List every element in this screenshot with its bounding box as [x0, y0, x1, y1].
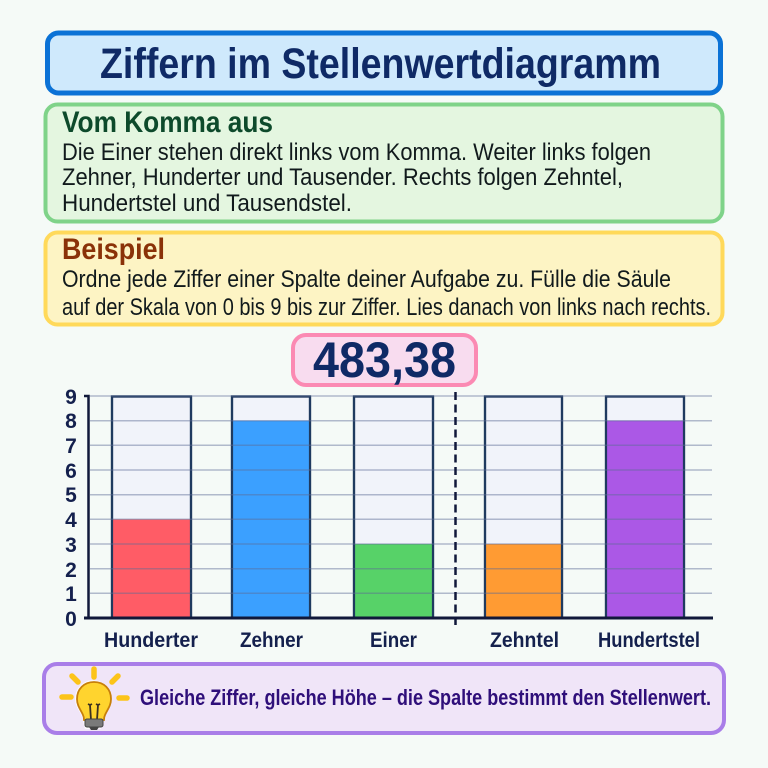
- bar: Einer 3: [354, 396, 433, 618]
- column labels: Einer: [370, 629, 417, 652]
- column labels: Hunderter: [104, 629, 198, 652]
- bar: Zehntel 3: [485, 396, 562, 618]
- y axis labels: [65, 386, 77, 631]
- y axis labels: 5: [65, 484, 77, 507]
- text block: Vom Komma aus: Hundertstel und Tausendstel.: [62, 190, 352, 217]
- column labels: [104, 629, 700, 652]
- panel: Beispiel: [46, 232, 722, 324]
- y axis labels: 7: [65, 435, 77, 458]
- y axis labels: 6: [65, 460, 77, 483]
- bar: Hundertstel 8: [606, 396, 684, 618]
- text block: Vom Komma aus: Die Einer stehen direkt links vom Komma. Weiter links folgen: [62, 139, 651, 166]
- text block: Vom Komma aus: Zehner, Hunderter und Tausender. Rechts folgen Zehntel,: [62, 164, 623, 191]
- y axis labels: 0: [65, 608, 77, 631]
- text block: Beispiel: [62, 266, 711, 321]
- number callout: 483,38: 483,38: [313, 332, 456, 388]
- heading: Vom Komma aus: Vom Komma aus: [62, 106, 273, 139]
- heading: Beispiel: Beispiel: [62, 233, 165, 266]
- column labels: Zehntel: [490, 629, 559, 652]
- axes: [84, 396, 713, 618]
- y axis labels: 9: [65, 386, 77, 409]
- panel: tip: [44, 664, 724, 733]
- bar: Hunderter 4: [112, 396, 191, 618]
- panel: Vom Komma aus: [46, 104, 722, 222]
- y axis labels: 2: [65, 559, 77, 582]
- y axis labels: 1: [65, 583, 77, 606]
- y axis labels: 4: [65, 509, 77, 532]
- bar: Zehner 8: [232, 396, 310, 618]
- text block: Beispiel: Ordne jede Ziffer einer Spalte deiner Aufgabe zu. Fülle die Säule: [62, 266, 671, 293]
- title: Ziffern im Stellenwertdiagramm: [100, 40, 661, 88]
- y axis labels: 3: [65, 534, 77, 557]
- grid lines: [90, 396, 712, 593]
- column labels: Hundertstel: [598, 629, 700, 652]
- bar chart: [65, 386, 713, 652]
- icon: light bulb: [62, 669, 127, 730]
- column labels: Zehner: [240, 629, 303, 652]
- y axis labels: 8: [65, 410, 77, 433]
- text block: Vom Komma aus: [62, 139, 651, 217]
- decimal comma divider: [454, 392, 457, 628]
